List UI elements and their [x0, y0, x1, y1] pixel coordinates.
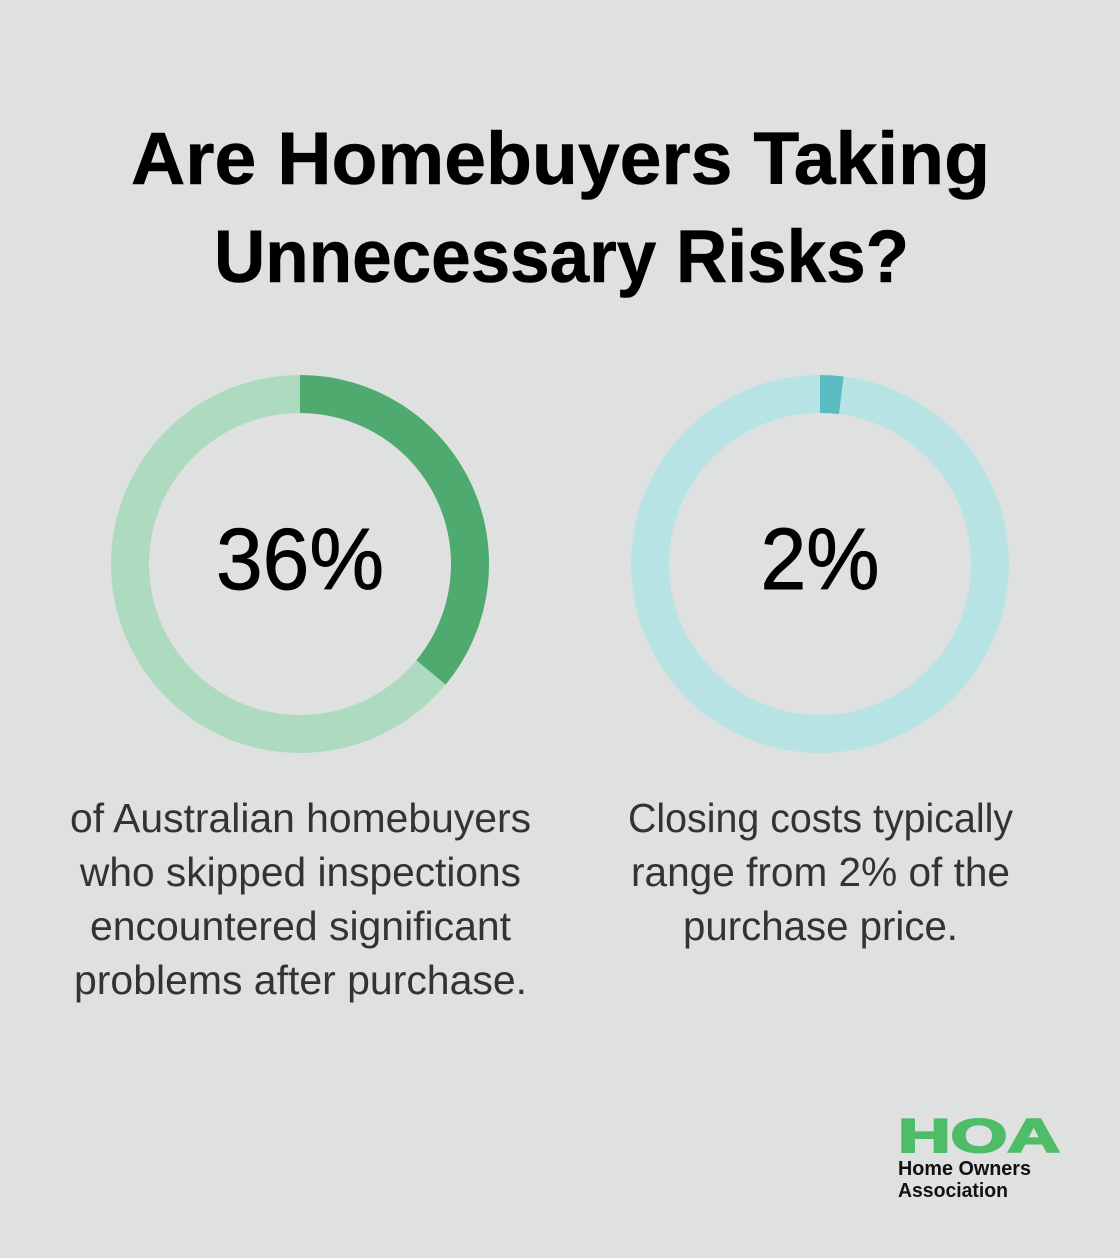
title: Are Homebuyers Taking [131, 117, 990, 200]
logo: Home Owners Association: Home Owners [898, 1158, 1031, 1180]
panel: 2% statistic [628, 394, 1013, 949]
logo: Home Owners Association [898, 1109, 1060, 1202]
value: 36%: 36% [216, 511, 384, 608]
description: closing costs: Closing costs typically [628, 795, 1013, 841]
description: skipped inspections [70, 795, 531, 1003]
description: skipped inspections: problems after purchase. [74, 957, 527, 1003]
value: 2%: 2% [760, 511, 880, 608]
logo: Home Owners Association: Association [898, 1180, 1008, 1202]
title [131, 117, 990, 298]
donut chart: 2% [650, 394, 990, 734]
description: closing costs [628, 795, 1013, 949]
title: Unnecessary Risks? [214, 215, 909, 298]
description: skipped inspections: encountered significant [90, 903, 512, 949]
description: skipped inspections: of Australian homebuyers [70, 795, 531, 841]
description: skipped inspections: who skipped inspections [79, 849, 521, 895]
description: closing costs: purchase price. [683, 903, 958, 949]
panel: 36% statistic [70, 394, 531, 1003]
logo: Home Owners Association: HOA [898, 1109, 1060, 1162]
description: closing costs: range from 2% of the [631, 849, 1010, 895]
donut chart: 36% [130, 394, 470, 734]
